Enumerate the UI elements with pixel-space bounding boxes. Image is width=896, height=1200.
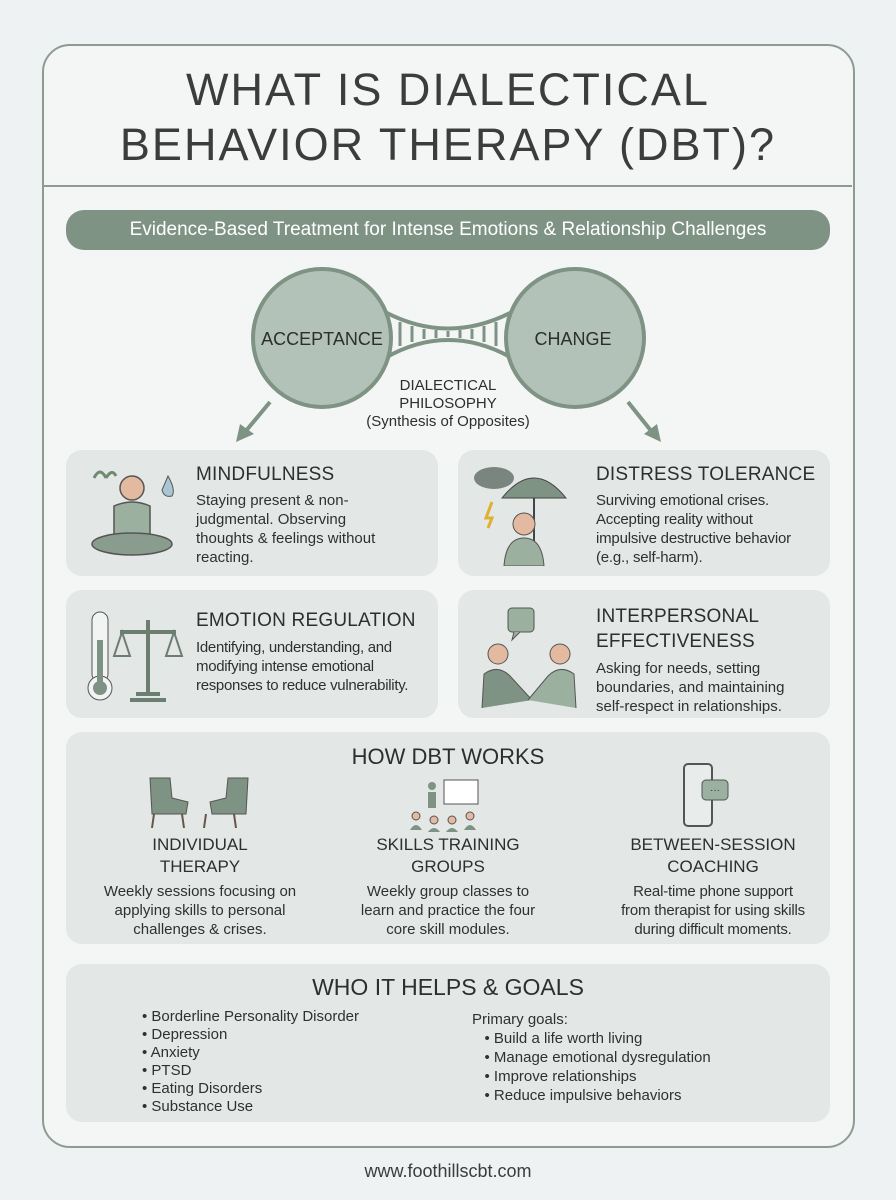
list: conditions: • Borderline Personality Disorder [142, 1008, 359, 1025]
column: individual therapy: challenges & crises. [133, 921, 267, 938]
card: emotion regulation [66, 590, 438, 718]
column: skills training: SKILLS TRAINING [376, 835, 520, 854]
panel: how DBT works [66, 732, 830, 944]
column: coaching: COACHING [667, 857, 759, 876]
column: skills training: Weekly group classes to [367, 883, 529, 900]
card: interpersonal effectiveness [458, 590, 830, 718]
icon: thermometer and scales [88, 612, 184, 702]
card: mindfulness [66, 450, 438, 576]
icon: chairs [150, 778, 248, 828]
list: goals [472, 1011, 711, 1104]
icon: phone [683, 763, 728, 827]
card: emotion regulation: Identifying, understanding, and modifying intense emotional responses to reduce vulnerability. [196, 639, 408, 694]
diagram: acceptance change bridge [236, 267, 661, 442]
panel: who it helps [66, 964, 830, 1122]
list: conditions: • Depression [142, 1026, 227, 1043]
column: coaching: from therapist for using skills [621, 902, 805, 919]
column: coaching [621, 835, 805, 938]
card: distress tolerance: DISTRESS TOLERANCE [596, 464, 815, 485]
banner [66, 210, 830, 250]
heading: HOW DBT WORKS [352, 744, 544, 769]
icon: phone: ··· [710, 785, 720, 796]
title: WHAT IS DIALECTICAL [186, 64, 710, 115]
card: interpersonal effectiveness: Asking for needs, setting boundaries, and maintaining [596, 660, 784, 696]
list: goals: • Improve relationships [484, 1068, 636, 1085]
diagram: acceptance change bridge: ACCEPTANCE [261, 329, 383, 349]
card: mindfulness: Staying present & non-judgmental. Observing thoughts & feelings without reacting. [196, 492, 375, 566]
card: distress tolerance: Surviving emotional crises. Accepting reality without [596, 492, 769, 528]
list: conditions: • Eating Disorders [142, 1080, 262, 1097]
column: coaching: Real-time phone support [633, 883, 793, 900]
card: distress tolerance [458, 450, 830, 576]
column: individual therapy: Weekly sessions focusing on [104, 883, 296, 900]
column: coaching: BETWEEN-SESSION [630, 835, 796, 854]
card: interpersonal effectiveness: self-respect in relationships. [596, 698, 782, 715]
icon: handshake with speech bubble [482, 608, 576, 708]
card: emotion regulation: EMOTION REGULATION [196, 610, 416, 631]
diagram: acceptance change bridge: (Synthesis of Opposites) [366, 413, 530, 430]
list: goals: Primary goals: [472, 1011, 568, 1028]
card: interpersonal effectiveness: EFFECTIVENESS [596, 631, 755, 652]
list: goals: • Build a life worth living [484, 1030, 642, 1047]
card: distress tolerance: impulsive destructive behavior (e.g., self-harm). [596, 530, 791, 566]
list: goals: • Reduce impulsive behaviors [484, 1087, 682, 1104]
footer url: www.foothillscbt.com [364, 1161, 532, 1181]
heading: WHO IT HELPS & GOALS [312, 974, 584, 1000]
list: conditions: • Substance Use [142, 1098, 253, 1115]
column: individual therapy: THERAPY [160, 857, 240, 876]
diagram: acceptance change bridge: CHANGE [534, 329, 612, 349]
column: skills training: core skill modules. [386, 921, 510, 938]
title: BEHAVIOR THERAPY (DBT)? [120, 119, 776, 170]
column: coaching: during difficult moments. [634, 921, 792, 938]
column: skills training: GROUPS [411, 857, 485, 876]
column: skills training: learn and practice the four [361, 902, 535, 919]
column: individual therapy: applying skills to personal [115, 902, 285, 919]
column: skills training [361, 835, 535, 938]
column: individual therapy: INDIVIDUAL [152, 835, 248, 854]
card: mindfulness: MINDFULNESS [196, 464, 334, 485]
icon: meditating person [91, 470, 174, 556]
title [120, 64, 776, 170]
list: goals: • Manage emotional dysregulation [484, 1049, 711, 1066]
list: conditions [142, 1008, 359, 1115]
banner: Evidence-Based Treatment for Intense Emotions & Relationship Challenges [130, 219, 766, 240]
diagram: acceptance change bridge: DIALECTICAL [400, 377, 496, 394]
list: conditions: • Anxiety [142, 1044, 200, 1061]
card: interpersonal effectiveness: INTERPERSONAL [596, 606, 759, 627]
icon: umbrella in rain [474, 467, 567, 566]
diagram: acceptance change bridge: PHILOSOPHY [399, 395, 497, 412]
column: individual therapy [104, 835, 296, 938]
icon: group training [410, 780, 478, 832]
list: conditions: • PTSD [142, 1062, 191, 1079]
